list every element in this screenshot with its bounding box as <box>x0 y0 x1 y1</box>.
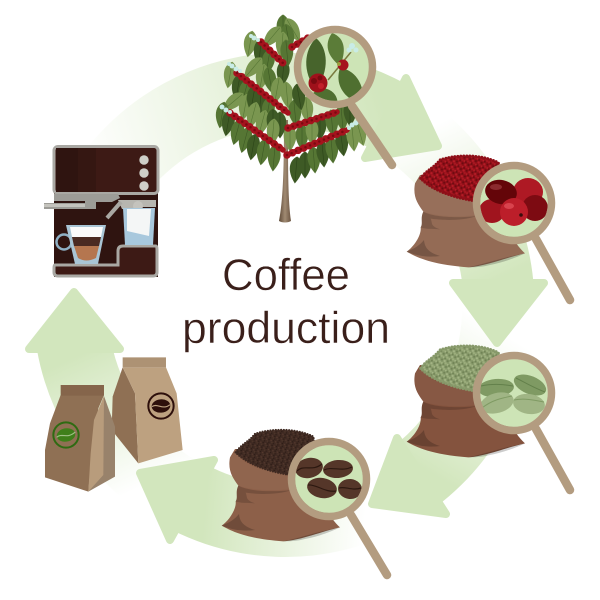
title <box>182 251 390 353</box>
sack: green coffee beans <box>407 346 525 457</box>
arrow head: green beans to roasted beans <box>372 438 446 514</box>
arrow head: roasted beans to packaging <box>140 460 214 540</box>
arrow head: packaging to coffee machine <box>29 292 120 349</box>
magnifier: green beans <box>476 356 570 490</box>
espresso machine <box>44 146 158 277</box>
back coffee bag <box>112 357 183 463</box>
arrow head: cherries to green beans <box>453 283 544 343</box>
arrow head: tree to cherries <box>365 78 438 158</box>
upper housing <box>54 146 158 194</box>
sack: roasted coffee beans <box>222 430 340 541</box>
coffee tree <box>213 14 370 222</box>
milk jug <box>123 208 155 245</box>
title: Coffee <box>222 251 350 300</box>
machine body <box>54 193 158 277</box>
background cycle ring <box>37 53 536 557</box>
title: production <box>182 304 390 353</box>
drip tray <box>54 246 157 276</box>
logo: roasted bean <box>148 393 174 419</box>
coffee cup <box>56 225 106 264</box>
brew group <box>44 194 156 218</box>
logo: green bean <box>53 422 79 448</box>
magnifier: coffee branch <box>298 30 392 165</box>
magnifier: red cherries <box>476 166 570 300</box>
sack: red coffee cherries <box>407 156 525 267</box>
front coffee bag <box>45 385 115 492</box>
magnifier: roasted beans <box>292 442 387 575</box>
